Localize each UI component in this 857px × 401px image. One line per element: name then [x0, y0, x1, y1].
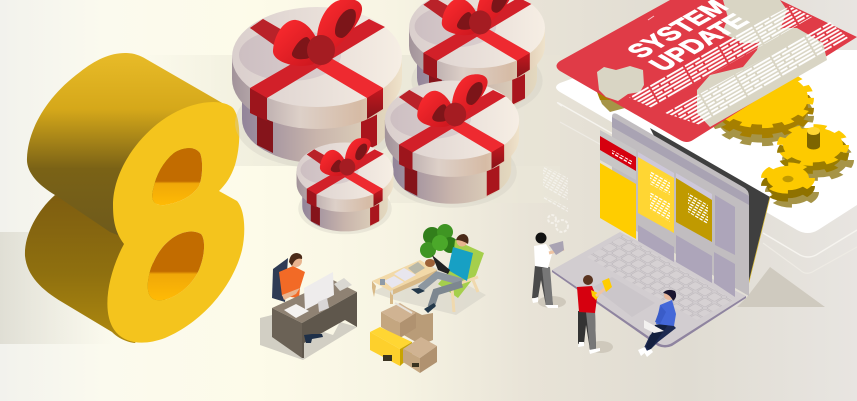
- gold article card: [676, 173, 712, 242]
- gift box small: [297, 138, 393, 234]
- white platform: [556, 50, 857, 233]
- red header card: [600, 130, 636, 180]
- keyboard: [587, 235, 733, 320]
- lavender cards: [638, 195, 735, 297]
- medium gear with pin: [783, 127, 848, 177]
- red system update panel: [556, 0, 857, 142]
- small floating paragraph icon: [543, 165, 568, 232]
- table: [372, 260, 437, 304]
- yellow box: [370, 327, 412, 349]
- gears: [597, 71, 848, 204]
- heading: system update: UPDATE: [643, 10, 755, 75]
- desk: [272, 280, 357, 323]
- seated man with laptop: [411, 234, 473, 313]
- white text lines on panel: [628, 6, 848, 125]
- laptop: [552, 113, 770, 348]
- gift box top right: [409, 0, 545, 117]
- office desk with worker: [260, 253, 357, 360]
- small gold piece under blob: [597, 92, 630, 112]
- counter holes: [152, 148, 202, 205]
- number 8: [25, 53, 244, 343]
- office chair: [272, 258, 288, 302]
- trackpad: [593, 277, 655, 317]
- cardboard boxes: [370, 303, 437, 373]
- yellow article card: [638, 152, 674, 233]
- monitor: [304, 272, 334, 312]
- yellow card: [600, 163, 636, 239]
- outline platforms: [558, 103, 857, 273]
- shoes: [304, 334, 323, 343]
- person with tablet: [532, 232, 566, 308]
- small gear: [767, 166, 813, 204]
- person with laptop sitting: [638, 290, 676, 357]
- laptop shadow: [737, 267, 825, 307]
- person in red shirt: [577, 275, 613, 354]
- laptop base: [552, 232, 746, 345]
- keyboard papers: [284, 304, 309, 318]
- front box: [403, 337, 437, 358]
- beige patches: [597, 0, 827, 127]
- big gear: [716, 71, 808, 143]
- armchair: [438, 240, 484, 312]
- lounge with plant and armchair: [372, 224, 486, 315]
- worker in orange shirt: [279, 253, 305, 300]
- gift box large: [232, 0, 402, 168]
- plant: [420, 224, 458, 267]
- screen back edge: [650, 128, 770, 294]
- gift box middle right: [385, 74, 519, 208]
- front face: [107, 102, 244, 343]
- screen: [612, 113, 749, 296]
